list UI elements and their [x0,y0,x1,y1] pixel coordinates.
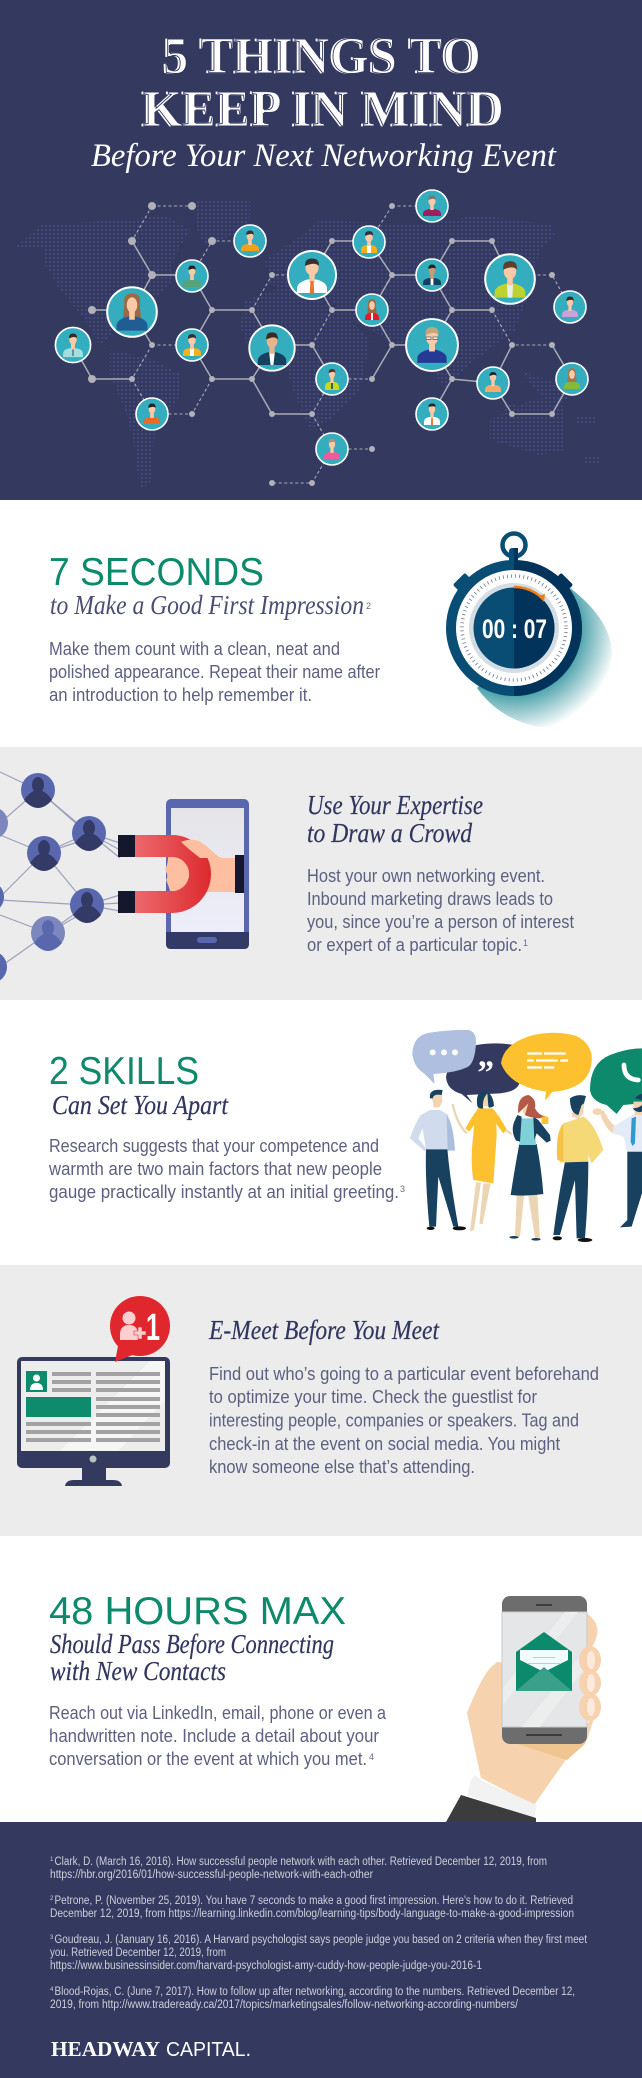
body text: Make them count with a clean, neat and [49,639,340,659]
panel: e-meet [0,1265,642,1536]
footnote 1: https://hbr.org/2016/01/how-successful-people-network-with-each-other [50,1869,373,1881]
body text: Find out who’s going to a particular event beforehand [209,1364,599,1384]
body text: an introduction to help remember it. [49,685,312,705]
icon: friend request bubble: 1 [146,1307,160,1349]
body text: 3 [400,1184,405,1194]
panel: 7 seconds [0,500,642,747]
body text: you, since you’re a person of interest [307,912,574,932]
footnote 1: 1 [50,1857,54,1863]
footnote 2: Petrone, P. (November 25, 2019). You have 7 seconds to make a good first impression. Here's how to do it. Retrieved [54,1895,573,1907]
body text: gauge practically instantly at an initial greeting. [49,1182,399,1202]
heading: use your expertise: Use Your Expertise [307,790,483,820]
network connections [73,206,572,483]
icon: phone [166,799,249,949]
panel: expertise [0,747,642,1000]
panel: footer [0,1822,642,2078]
subheading: first impression: to Make a Good First Impression [50,590,364,620]
avatar: pink [316,433,348,465]
body text: Host your own networking event. [307,866,545,886]
avatar: woman green [556,363,588,395]
person: woman in yellow dress [453,1091,512,1232]
body text: interesting people, companies or speakers. Tag and [209,1410,579,1430]
heading: use your expertise: to Draw a Crowd [307,818,472,848]
avatar: green shirt [176,260,208,292]
body text: know someone else that’s attending. [209,1457,475,1477]
subheading: set you apart: Can Set You Apart [52,1090,229,1120]
body text: Reach out via LinkedIn, email, phone or even a [49,1703,387,1723]
heading: 2 skills: 2 SKILLS [49,1050,199,1093]
footnote 3: you. Retrieved December 12, 2019, from [50,1947,226,1959]
avatar: teal shirt [55,327,91,363]
body text: Inbound marketing draws leads to [307,889,553,909]
body text: polished appearance. Repeat their name after [49,662,380,682]
avatar: woman in blue [107,287,157,337]
speech bubble: navy quote [446,1043,519,1103]
body text: Research suggests that your competence and [49,1136,379,1156]
subheading: connecting [50,1629,334,1686]
avatar: dark suit [416,259,448,291]
footnote 2 [50,1895,574,1920]
footnote 3 [50,1934,588,1972]
panel: 2 skills [0,1000,642,1265]
footnote 4: Blood-Rojas, C. (June 7, 2017). How to follow up after networking, according to the numbers. Retrieved December 12, [54,1986,575,1998]
title: KEEP IN MIND [143,81,505,138]
panel: header [0,0,642,500]
title: 5 THINGS TO [164,28,482,85]
body text [307,866,574,955]
heading: 7 seconds: 7 SECONDS [49,551,264,594]
icon: stopwatch: 00 : 07 [482,614,547,644]
avatar: glasses yellow shirt [353,226,385,258]
heading: e-meet: E-Meet Before You Meet [208,1315,440,1345]
footnote 3: https://www.businessinsider.com/harvard-psychologist-amy-cuddy-how-people-judge-you-2016-1 [50,1960,482,1972]
body text: or expert of a particular topic. [307,935,522,955]
logo: Headway Capital: CAPITAL. [166,2039,251,2061]
footnote 1: Clark, D. (March 16, 2016). How successful people network with each other. Retrieved December 12, 2019, from [54,1856,547,1868]
body text: 4 [369,1752,374,1762]
body text: conversation or the event at which you met. [49,1749,367,1769]
icon: stopwatch [446,534,612,727]
footnote 3: 3 [50,1935,54,1941]
illustration: hand holding phone [446,1596,601,1822]
avatar: lilac shirt [554,291,586,323]
avatar: purple shirt [416,190,448,222]
person: man with beard [593,1094,642,1227]
avatar: orange top [136,398,168,430]
body text: warmth are two main factors that new people [48,1159,382,1179]
avatar: white shirt orange tie [416,398,448,430]
speech bubble: navy quote: ” [477,1054,494,1091]
person: man in yellow shirt [553,1095,603,1242]
body text: handwritten note. Include a detail about your [49,1726,379,1746]
title: 5 THINGS TO [162,28,480,85]
avatar: man glasses blue [406,319,458,371]
footnote 4: 4 [50,1987,54,1993]
avatar: yellow-green [316,363,348,395]
body text: to optimize your time. Check the guestlist for [209,1387,537,1407]
speech bubble: light blue dots [412,1030,476,1084]
subheading: connecting: Should Pass Before Connecting [50,1629,334,1659]
icon: friend request bubble [110,1296,170,1362]
footnote 2: 2 [50,1896,54,1902]
body text [48,1136,405,1202]
subheading: first impression: 2 [366,601,371,611]
avatar: orange shirt [234,225,266,257]
logo: Headway Capital: HEADWAY [51,2037,160,2061]
footnote 1 [50,1856,547,1881]
heading: use your expertise [307,790,483,848]
body text: 1 [523,938,528,948]
body text [49,639,380,705]
body text [49,1703,387,1769]
body text [209,1364,599,1477]
avatar: peach [477,367,509,399]
heading: 48 hours max: 48 HOURS MAX [49,1590,346,1633]
title: KEEP IN MIND [141,81,503,138]
network nodes [88,202,555,486]
avatar: woman red [356,294,388,326]
title [141,28,505,138]
illustration: people talking [410,1030,642,1242]
person: woman with red hair [509,1095,551,1241]
avatar: glasses yellow [176,329,208,361]
icon: hand with magnet [118,835,244,913]
icon: monitor [17,1357,170,1486]
footnote 4: 2019, from http://www.tradeready.ca/2017/topics/marketingsales/follow-networking-according-numbers/ [50,1999,519,2011]
subheading: connecting: with New Contacts [50,1656,226,1686]
illustration: people network [0,772,120,983]
dotted world map [16,201,600,488]
footnote 2: December 12, 2019, from https://learning.linkedin.com/blog/learning-tips/body-language-to-make-a-good-impression [50,1908,574,1920]
body text: check-in at the event on social media. You might [209,1434,560,1454]
avatar: man navy suit [249,325,295,371]
panel: 48 hours [0,1536,642,1822]
avatar: man orange tie [288,251,336,299]
footnote 4 [50,1986,575,2011]
logo: Headway Capital [51,2037,251,2061]
speech bubble: yellow text lines [501,1033,592,1101]
avatar: man lime jacket [485,254,535,304]
subtitle: Before Your Next Networking Event [91,138,557,174]
speech bubble: green phone [590,1048,642,1114]
person: man in blue shirt [410,1090,466,1230]
